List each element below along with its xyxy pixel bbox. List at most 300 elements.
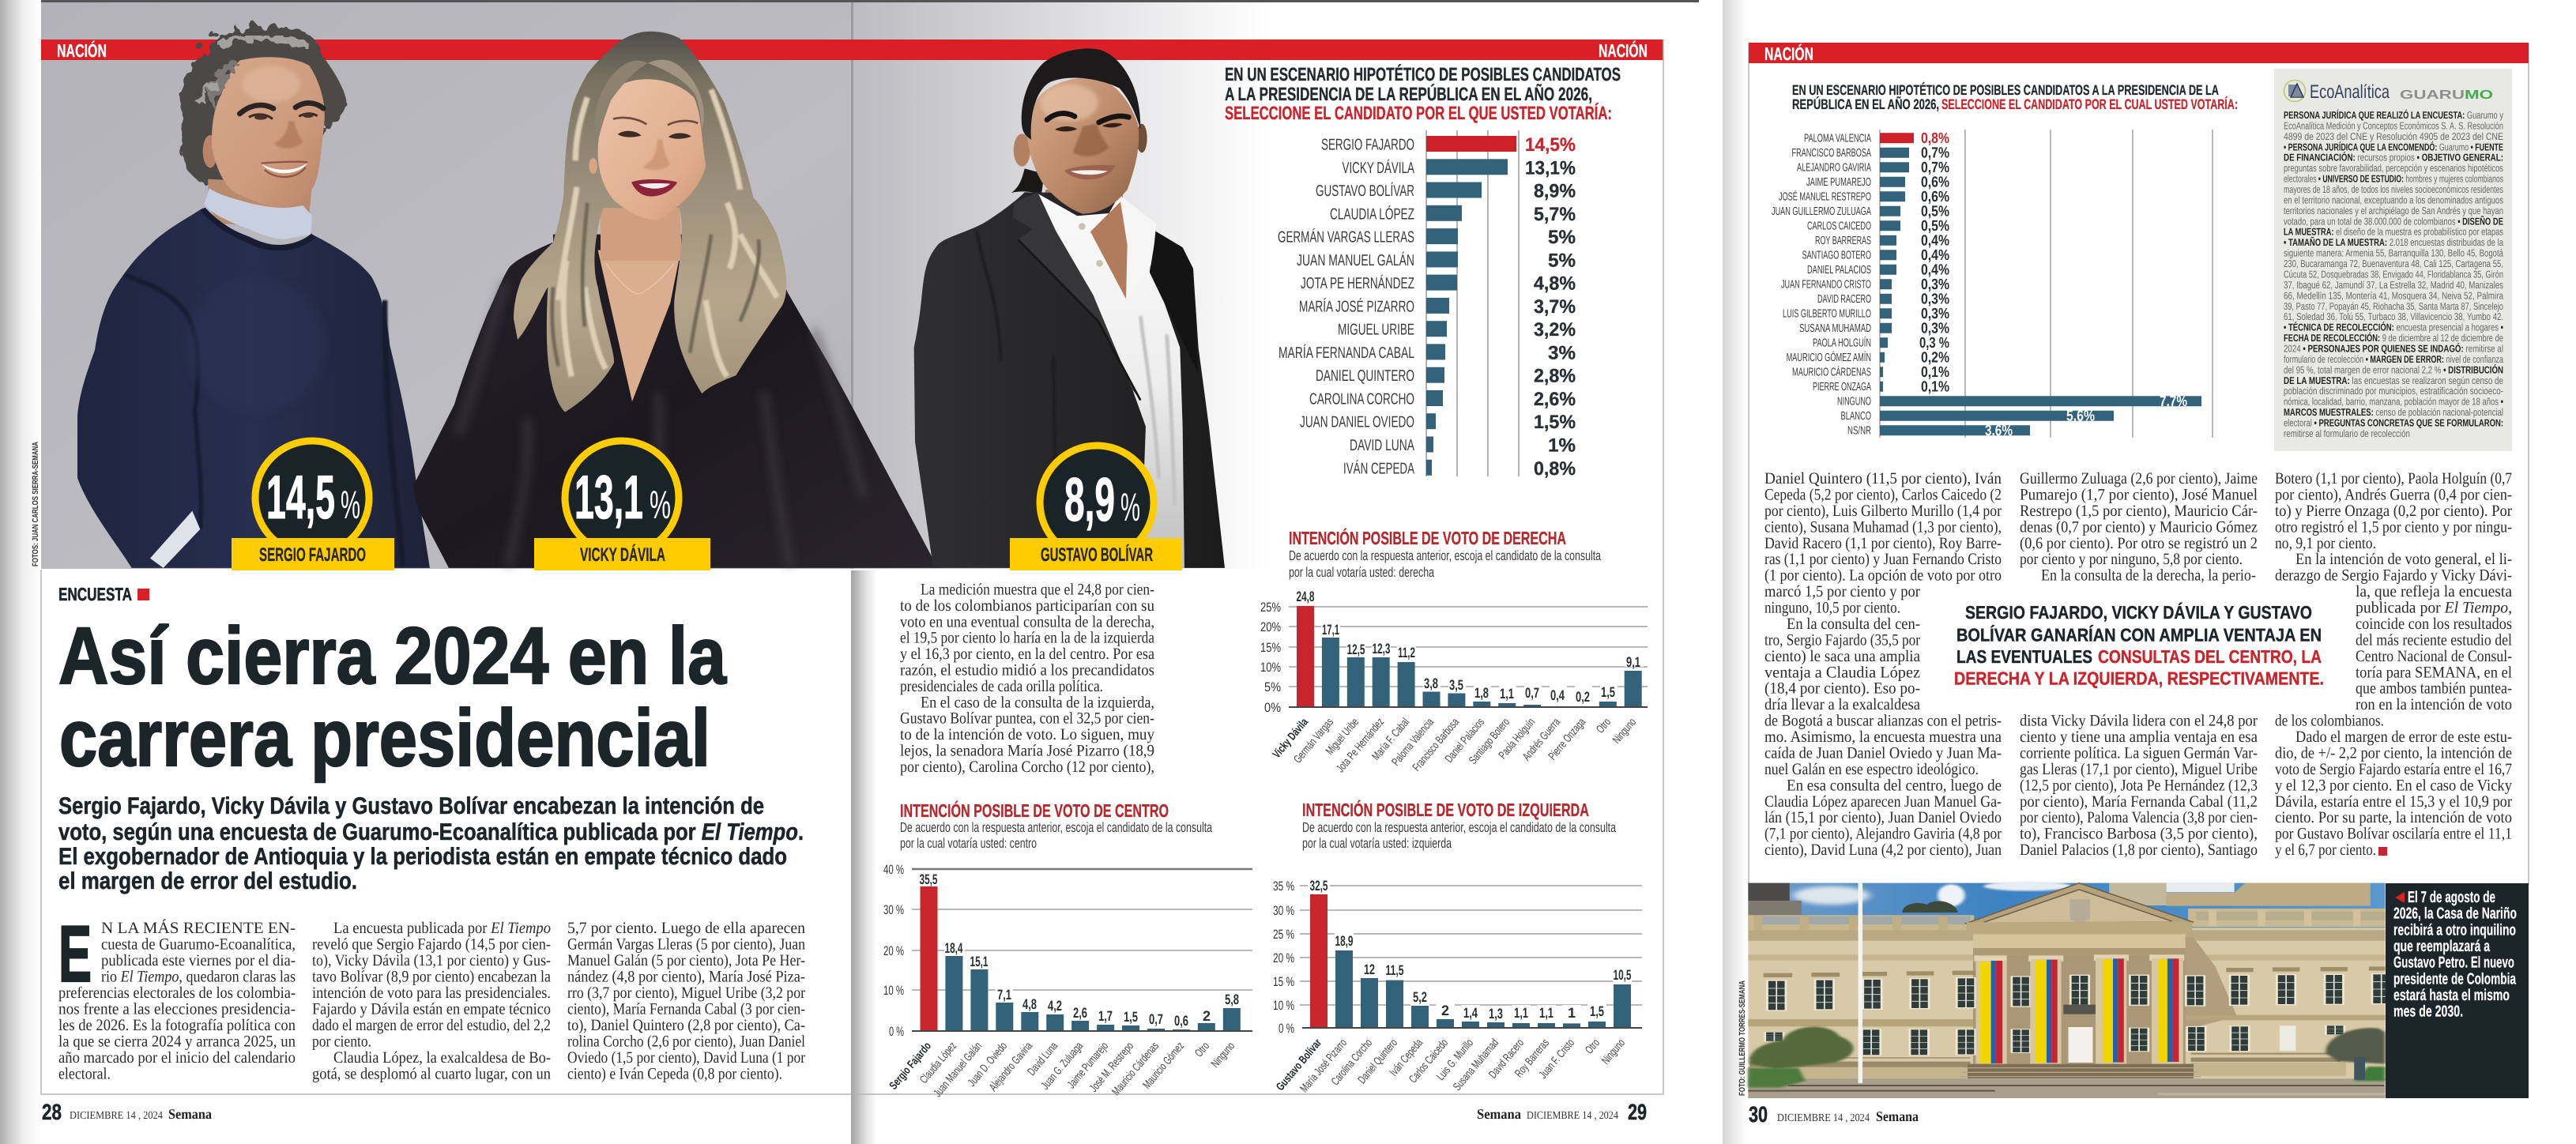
column chart centro: 2 xyxy=(1203,1008,1211,1024)
body column 2, page 28: reveló que Sergio Fajardo (14,5 por cien- xyxy=(312,935,551,953)
column chart derecha: Miguel Uribe xyxy=(1324,716,1361,758)
column chart derecha: Santiago Botero xyxy=(1467,716,1512,767)
body column 1, page 28 xyxy=(58,919,296,1082)
technical sheet text: electorales • UNIVERSO DE ESTUDIO: hombres y mujeres colombianos xyxy=(2284,173,2503,185)
body column 1, page 30: nuel Galán en ese espectro ideológico. xyxy=(1764,761,1979,778)
column chart centro: 10 % xyxy=(883,984,904,998)
horizontal bar chart: remaining candidates: 0,3% xyxy=(1921,277,1949,293)
body column 3, page 30: coincide con los resultados xyxy=(2356,615,2512,633)
column chart centro: Juan Manuel Galán xyxy=(932,1040,985,1100)
column chart centro: Mauricio Cárdenas xyxy=(1110,1040,1162,1098)
column chart derecha: 0,4 xyxy=(1550,687,1565,703)
column chart izquierda: Carolina Corcho xyxy=(1329,1037,1375,1088)
column chart derecha: Paola Holguín xyxy=(1497,716,1538,762)
body column, page 29: el 19,5 por ciento lo haría en la de la izquierda xyxy=(900,630,1154,647)
chart title centro: INTENCIÓN POSIBLE DE VOTO DE CENTRO xyxy=(900,800,1169,821)
row: Carolina Corcho: 2,6% xyxy=(1534,389,1576,410)
body column 2, page 30: Pumarejo (1,7 por ciento), José Manuel xyxy=(2020,486,2258,503)
row: Carolina Corcho: CAROLINA CORCHO xyxy=(1309,390,1414,408)
kicker: encuesta: ENCUESTA xyxy=(58,584,132,604)
column chart derecha xyxy=(1260,589,1648,775)
horizontal bar chart: remaining candidates: 0,3% xyxy=(1921,291,1949,308)
technical sheet text: 37, Ibagué 62, Jamundí 37, La Estrella 32, Madrid 40, Manizales xyxy=(2284,279,2503,291)
body column 1, page 30 xyxy=(1764,470,2002,859)
column chart izquierda: Otro xyxy=(1583,1037,1602,1056)
horizontal bar chart: remaining candidates: 0,7% xyxy=(1921,145,1949,161)
column chart centro: 1,7 xyxy=(1098,1008,1113,1024)
right page gutter shadow xyxy=(851,570,877,1144)
body column 2, page 30: to), Francisco Barbosa (3,5 por ciento), xyxy=(2020,826,2258,843)
caption box: Casa de Nariño: mes de 2030. xyxy=(2393,1003,2463,1021)
body column 1, page 30: Daniel Quintero (11,5 por ciento), Iván xyxy=(1764,470,2002,487)
row: Germán Vargas Lleras xyxy=(1278,227,1576,248)
row: María José Pizarro: 3,7% xyxy=(1534,296,1576,318)
percentage badge: Gustavo Bolívar: % xyxy=(1120,485,1140,529)
body column 3, page 28: rro (3,7 por ciento), Miguel Uribe (3,2 por xyxy=(567,984,805,1002)
figure: Gustavo Bolívar xyxy=(914,48,1225,568)
technical sheet text: 61, Soledad 36, Tolú 55, Turbaco 38, Villavicencio 38, Yumbo 42. xyxy=(2284,310,2503,322)
body column 3, page 28: rolina Corcho (2,6 por ciento), Juan Daniel xyxy=(567,1033,805,1050)
percentage badge: Sergio Fajardo: % xyxy=(341,483,360,527)
row: Jota Pe Hernández xyxy=(1301,273,1576,295)
body column 2, page 30: gas Lleras (17,1 por ciento), Miguel Uribe xyxy=(2020,761,2258,778)
row: Germán Vargas Lleras: GERMÁN VARGAS LLERAS xyxy=(1278,228,1414,246)
row: Sergio Fajardo xyxy=(1321,134,1576,156)
column chart derecha: Ninguno xyxy=(1610,716,1639,747)
column chart izquierda: 0 % xyxy=(1279,1022,1294,1036)
column chart derecha: 0% xyxy=(1264,701,1281,715)
photo credit: left page: FOTOS: JUAN CARLOS SIERRA-SEMANA xyxy=(31,442,40,566)
technical sheet text: votado, para un total de 38.000.000 de colombianos • DISEÑO DE xyxy=(2284,215,2503,227)
horizontal bar chart: remaining candidates: NINGUNO xyxy=(1837,396,1871,408)
column chart derecha: Andrés Guerra xyxy=(1520,716,1563,763)
chart subtitle izquierda: De acuerdo con la respuesta anterior, escoja el candidato de la consulta xyxy=(1302,819,1616,835)
pull quote: DERECHA Y LA IZQUIERDA, RESPECTIVAMENTE. xyxy=(1954,668,2324,689)
row: David Luna: DAVID LUNA xyxy=(1350,437,1414,454)
fold line xyxy=(851,2,853,569)
column chart izquierda: Daniel Quintero xyxy=(1356,1037,1400,1086)
column chart derecha: 15% xyxy=(1260,641,1281,655)
horizontal bar chart: remaining candidates: PIERRE ONZAGA xyxy=(1813,381,1871,393)
body column 1, page 30: En la consulta del cen- xyxy=(1787,615,1920,633)
body column, page 29: La medición muestra que el 24,8 por cien- xyxy=(921,581,1154,599)
footer page 28: DICIEMBRE 14 , 2024 xyxy=(70,1110,163,1122)
row: Daniel Quintero: DANIEL QUINTERO xyxy=(1316,367,1414,385)
body column 1, page 30: de Bogotá a buscar alianzas con el petris- xyxy=(1764,713,2002,730)
row: María Fernanda Cabal xyxy=(1279,342,1576,363)
column chart derecha: 12,3 xyxy=(1372,641,1391,657)
column chart izquierda: Ninguno xyxy=(1599,1037,1628,1067)
body column 3, page 28: to), Daniel Quintero (2,8 por ciento), Ca- xyxy=(567,1017,805,1034)
column chart izquierda: 1 xyxy=(1568,1005,1576,1021)
column chart centro: Alejandro Gaviria xyxy=(987,1040,1035,1094)
technical sheet text: en el territorio nacional, exceptuando a los denominados antiguos xyxy=(2284,194,2503,205)
upper balustrade xyxy=(1748,909,2386,932)
horizontal bar chart: remaining candidates: 0,2% xyxy=(1921,349,1949,367)
body column 2, page 28 xyxy=(312,920,551,1082)
body column 1, page 28: electoral. xyxy=(58,1065,111,1082)
column chart izquierda: 1,3 xyxy=(1489,1006,1503,1022)
body column, page 29: to de los colombianos participarían con su xyxy=(900,597,1154,615)
column chart izquierda: 18,9 xyxy=(1335,933,1353,949)
footer page 29: 29 xyxy=(1628,1100,1647,1124)
row: Juan Daniel Oviedo: JUAN DANIEL OVIEDO xyxy=(1300,414,1414,431)
deck paragraph: Sergio Fajardo, Vicky Dávila y Gustavo Bolívar encabezan la intención de xyxy=(58,793,764,819)
column chart derecha: 3,5 xyxy=(1449,677,1463,693)
horizontal bar chart: remaining candidates: JOSÉ MANUEL RESTREPO xyxy=(1779,190,1871,204)
body column 3, page 30: Dávila, estaría entre el 15,3 y el 10,9 por xyxy=(2275,793,2512,811)
technical sheet text: DE LA MUESTRA: las encuestas se realizaron según censo de xyxy=(2284,374,2503,386)
column chart izquierda: 12 xyxy=(1364,961,1375,977)
body column 1, page 28: preferencias electorales de los colombia- xyxy=(58,984,296,1002)
column chart izquierda: Juan F. Cristo xyxy=(1537,1037,1577,1082)
caption box: Casa de Nariño: Gustavo Petro. El nuevo xyxy=(2393,954,2514,972)
heading: page 30 question: REPÚBLICA EN EL AÑO 2026, xyxy=(1792,96,1939,112)
row: María Fernanda Cabal: 3% xyxy=(1548,342,1576,363)
column chart centro: José M. Restrepo xyxy=(1087,1040,1136,1095)
body column 2, page 30: por ciento y por ninguno, 5,8 por ciento. xyxy=(2020,551,2243,568)
body column 1, page 30: mo. Asimismo, la encuesta muestra una xyxy=(1764,728,2002,746)
body column 1, page 30: caída de Juan Daniel Oviedo y Juan Ma- xyxy=(1764,744,2002,762)
body column, page 29 xyxy=(900,581,1155,776)
column chart centro: 20 % xyxy=(883,944,904,958)
column chart centro: Ninguno xyxy=(1209,1040,1237,1071)
heading: hypothetical scenario question xyxy=(1225,64,1621,123)
column chart derecha: Francisco Barbosa xyxy=(1410,716,1462,774)
section bar: page 30 xyxy=(1749,43,2529,64)
trees and bushes xyxy=(1748,1027,2386,1088)
percentage badge: Sergio Fajardo: 14,5 xyxy=(266,462,335,532)
horizontal bar chart: remaining candidates: DANIEL PALACIOS xyxy=(1807,264,1871,277)
body column, page 29: to de la intención de voto. Lo siguen, muy xyxy=(900,726,1155,743)
portico pediment xyxy=(1965,883,2194,955)
body column 2, page 30: denas (0,7 por ciento) y Mauricio Gómez xyxy=(2020,518,2258,536)
columns with Colombian flags xyxy=(1974,954,2184,1064)
pull quote: CONSULTAS DEL CENTRO, LA xyxy=(2098,646,2322,667)
column chart derecha: 20% xyxy=(1260,620,1281,634)
row: Claudia López xyxy=(1330,204,1576,225)
body column 3, page 30: toría para SEMANA, en el xyxy=(2356,664,2512,681)
section bar: right page: NACIÓN xyxy=(1599,40,1648,61)
column chart centro: 7,1 xyxy=(997,987,1011,1003)
column chart izquierda xyxy=(1273,877,1642,1095)
column chart derecha: 0,2 xyxy=(1576,689,1590,705)
technical sheet text: • PERSONA JURÍDICA QUE LA ENCOMENDÓ: Guarumo • FUENTE xyxy=(2284,141,2503,152)
row: Carolina Corcho xyxy=(1309,389,1576,410)
row: Juan Daniel Oviedo: 1,5% xyxy=(1534,412,1576,433)
body column 1, page 30: ninguno, 10,5 por ciento. xyxy=(1764,599,1900,616)
column chart centro: 30 % xyxy=(883,903,904,917)
column chart derecha: 11,2 xyxy=(1398,645,1415,660)
courtyard xyxy=(1748,1078,2386,1098)
drop cap E: E xyxy=(58,910,92,999)
percentage badge: Vicky Dávila: 13,1 xyxy=(574,462,643,532)
technical sheet text: • TÉCNICA DE RECOLECCIÓN: encuesta presencial a hogares • xyxy=(2284,322,2503,333)
row: Iván Cepeda xyxy=(1343,458,1576,480)
body column 3, page 30: publicada por El Tiempo, xyxy=(2356,599,2512,616)
technical sheet text: nómica, localidad, barrio, manzana, población mayor de 18 años • xyxy=(2284,396,2503,408)
section bar: right page xyxy=(853,40,1663,61)
column chart derecha: 1,8 xyxy=(1474,685,1489,701)
column chart izquierda: 1,4 xyxy=(1463,1005,1478,1021)
column chart centro: 2,6 xyxy=(1073,1005,1087,1021)
row: Miguel Uribe: 3,2% xyxy=(1534,319,1576,341)
horizontal bar chart: remaining candidates: 0,3 % xyxy=(1919,335,1949,352)
footer page 29: DICIEMBRE 14 , 2024 xyxy=(1527,1110,1618,1122)
horizontal bar chart: remaining candidates: MAURICIO GÓMEZ AMÍN xyxy=(1787,351,1871,364)
body column 1, page 28: publicada este viernes por el dia- xyxy=(101,952,296,969)
column chart centro: Juan G. Zuluaga xyxy=(1039,1040,1086,1092)
main headline xyxy=(58,611,727,783)
chart subtitle centro: por la cual votaría usted: centro xyxy=(900,835,1037,851)
pull quote: LAS EVENTUALES xyxy=(1956,646,2092,667)
horizontal bar chart: remaining candidates xyxy=(1772,130,2213,439)
body column 3, page 28: ciento) e Iván Cepeda (0,8 por ciento). xyxy=(567,1065,782,1082)
column chart centro: 5,8 xyxy=(1225,992,1239,1007)
body column 3, page 28 xyxy=(567,920,805,1082)
body column 3, page 28: ciento), María Fernanda Cabal (3 por cien- xyxy=(567,1000,805,1018)
technical sheet text: 2024 • PERSONAJES POR QUIENES SE INDAGÓ: remitirse al xyxy=(2284,343,2503,354)
body column, page 29: presidenciales de cada orilla política. xyxy=(900,678,1103,695)
body column 3, page 30: voto de Sergio Fajardo estaría entre el 16,7 xyxy=(2275,761,2512,778)
heading: hypothetical scenario question: EN UN ESCENARIO HIPOTÉTICO DE POSIBLES CANDIDATOS xyxy=(1225,64,1621,85)
technical sheet text: PERSONA JURÍDICA QUE REALIZÓ LA ENCUESTA: Guarumo y xyxy=(2284,109,2503,121)
body column 3, page 30: del más reciente estudio del xyxy=(2356,631,2512,649)
row: Daniel Quintero: 2,8% xyxy=(1534,366,1576,387)
column chart izquierda: 11,5 xyxy=(1386,962,1403,978)
horizontal bar chart: remaining candidates: 0,8% xyxy=(1921,130,1949,147)
column chart derecha: 0,7 xyxy=(1525,685,1539,701)
pull quote: SERGIO FAJARDO, VICKY DÁVILA Y GUSTAVO xyxy=(1965,602,2312,623)
body column 3, page 30 xyxy=(2275,470,2513,859)
body column 2, page 28: Fajardo y Dávila están en empate técnico xyxy=(312,1000,551,1018)
body column, page 29: En el caso de la consulta de la izquierda, xyxy=(921,694,1154,711)
horizontal bar chart: remaining candidates: 0,3% xyxy=(1921,306,1949,322)
body column 1, page 30: En esa consulta del centro, luego de xyxy=(1787,777,2002,794)
icon: red left arrow xyxy=(2395,892,2405,903)
technical sheet text: MARCOS MUESTRALES: censo de población nacional-potencial xyxy=(2284,406,2503,418)
body column 1, page 30: (18,4 por ciento). Eso po- xyxy=(1764,680,1920,698)
caption box: Casa de Nariño: El 7 de agosto de xyxy=(2408,889,2495,906)
string course xyxy=(1748,1015,2386,1026)
chart subtitle izquierda xyxy=(1302,819,1616,851)
row: Juan Manuel Galán: 5% xyxy=(1548,250,1576,271)
technical sheet text: preguntas sobre favorabilidad, percepción y escenarios hipotéticos xyxy=(2284,162,2503,174)
body column 1, page 30: marcó 1,5 por ciento y por xyxy=(1764,583,1920,600)
panel: ficha técnica xyxy=(2274,69,2512,451)
body column 2, page 30: Restrepo (1,5 por ciento), Mauricio Cár- xyxy=(2020,502,2258,520)
heading: page 30 question xyxy=(1792,82,2238,112)
horizontal bar chart: remaining candidates: 5,6% xyxy=(2066,408,2095,425)
caption box: Casa de Nariño xyxy=(2386,883,2529,1098)
body column 2, page 28: to), Vicky Dávila (13,1 por ciento) y Gus- xyxy=(312,952,551,969)
column chart izquierda: Luis G. Murillo xyxy=(1434,1037,1476,1083)
caption box: Casa de Nariño: que reemplazará a xyxy=(2393,938,2491,955)
body column, page 29: Gustavo Bolívar puntea, con el 32,5 por cien- xyxy=(900,710,1154,728)
column chart izquierda: 2 xyxy=(1441,1003,1449,1018)
body column 2, page 28: tavo Bolívar (8,9 por ciento) encabezan la xyxy=(312,968,551,985)
column chart derecha: María F. Cabal xyxy=(1370,716,1412,763)
technical sheet text: población discriminado por municipios, estratificación socioeco- xyxy=(2284,385,2503,397)
caption box: Casa de Nariño: recibirá a otro inquilino xyxy=(2393,921,2516,939)
figure: Vicky Dávila xyxy=(413,32,940,568)
horizontal bar chart: remaining candidates: 0,4% xyxy=(1921,232,1949,250)
shaded portico xyxy=(1973,954,2186,1064)
main headline: carrera presidencial xyxy=(59,693,710,783)
body column, page 29: y el 16,3 por ciento, en la del centro. Por esa xyxy=(900,645,1154,663)
column chart izquierda: 1,5 xyxy=(1590,1003,1604,1019)
row: María Fernanda Cabal: MARÍA FERNANDA CABAL xyxy=(1279,344,1414,362)
column chart derecha: 1,1 xyxy=(1500,686,1514,702)
technical sheet text: territorios nacionales y el archipiélago de San Andrés y que hayan xyxy=(2284,205,2503,216)
body column 2, page 30: (0,6 por ciento). Por otro se registró un 2 xyxy=(2020,535,2258,552)
row: Daniel Quintero xyxy=(1316,366,1576,387)
row: Iván Cepeda: IVÁN CEPEDA xyxy=(1343,459,1414,477)
chart subtitle izquierda: por la cual votaría usted: izquierda xyxy=(1302,835,1452,851)
body column 1, page 30: Cepeda (5,2 por ciento), Carlos Caicedo (2 xyxy=(1764,486,2002,503)
body column 1, page 28: rio El Tiempo, quedaron claras las xyxy=(101,968,296,985)
column chart centro: Mauricio Gómez xyxy=(1141,1040,1187,1092)
body column 2, page 28: gotá, se desplomó al cuarto lugar, con un xyxy=(312,1065,551,1082)
column chart centro: 1,5 xyxy=(1124,1009,1138,1025)
chart subtitle derecha: De acuerdo con la respuesta anterior, escoja el candidato de la consulta xyxy=(1289,548,1601,563)
caption box: Casa de Nariño: presidente de Colombia xyxy=(2393,970,2517,988)
technical sheet text: 4899 de 2023 del CNE y Resolución 4905 de 2023 del CNE xyxy=(2284,130,2503,142)
column chart centro: David Luna xyxy=(1026,1040,1060,1078)
body column 1, page 30: lán (15,1 por ciento), Juan Daniel Oviedo xyxy=(1764,809,2002,826)
body column 1, page 28: año marcado por el inicio del calendario xyxy=(58,1049,296,1067)
body column 1, page 30: (7,1 por ciento), Alejandro Gaviria (4,8 por xyxy=(1764,826,2002,843)
body column 1, page 30: (1 por ciento). La opción de voto por otro xyxy=(1764,567,2002,585)
body column 2, page 30: (12,5 por ciento), Jota Pe Hernández (12,3 xyxy=(2020,777,2258,794)
column chart centro: Otro xyxy=(1192,1040,1212,1059)
technical sheet text xyxy=(2284,109,2504,439)
body column 2, page 30: ciento y tiene una amplia ventaja en esa xyxy=(2020,728,2258,746)
horizontal bar chart: remaining candidates: BLANCO xyxy=(1841,410,1871,423)
row: Miguel Uribe: MIGUEL URIBE xyxy=(1338,322,1414,339)
top edge strip xyxy=(0,0,1699,2)
horizontal bar chart: remaining candidates: 0,4% xyxy=(1921,247,1949,264)
caption box: Casa de Nariño: estará hasta el mismo xyxy=(2393,987,2510,1004)
column chart centro: 18,4 xyxy=(945,940,962,956)
deck paragraph: El exgobernador de Antioquia y la periodista están en empate técnico dado xyxy=(58,844,787,870)
horizontal bar chart: remaining candidates: 7,7% xyxy=(2160,393,2187,410)
horizontal bar chart: remaining candidates: 0,7% xyxy=(1921,160,1949,176)
horizontal bar chart: remaining candidates: 0,6% xyxy=(1921,189,1949,205)
horizontal bar chart: remaining candidates: PAOLA HOLGUÍN xyxy=(1813,337,1871,350)
body column 2, page 30: corriente política. La siguen Germán Var- xyxy=(2020,744,2258,762)
body column 3, page 30: de los colombianos. xyxy=(2275,713,2384,730)
row: David Luna xyxy=(1350,435,1576,457)
column chart centro: 15,1 xyxy=(970,954,988,969)
body column 3, page 28: 5,7 por ciento. Luego de ella aparecen xyxy=(567,920,805,937)
horizontal bar chart: remaining candidates: JAIME PUMAREJO xyxy=(1806,176,1871,189)
column chart izquierda: Gustavo Bolívar xyxy=(1274,1037,1324,1093)
column chart izquierda: 1,1 xyxy=(1539,1005,1554,1021)
column chart centro: 40 % xyxy=(883,863,904,877)
heading: hypothetical scenario question: SELECCIONE EL CANDIDATO POR EL QUE USTED VOTARÍA: xyxy=(1225,103,1612,123)
row: Iván Cepeda: 0,8% xyxy=(1534,458,1576,480)
column chart derecha: Jota Pe Hernández xyxy=(1335,716,1387,775)
footer page 28 xyxy=(42,1100,212,1124)
horizontal bar chart: remaining candidates: CARLOS CAICEDO xyxy=(1807,220,1871,233)
section bar: left page xyxy=(41,40,853,61)
body column 1, page 30: David Racero (1,1 por ciento), Roy Barre- xyxy=(1764,535,2002,552)
body column 2, page 28: dado el margen de error del estudio, del 2,2 xyxy=(312,1017,551,1034)
body column 1, page 30: ciento) le saca una amplia xyxy=(1764,648,1920,665)
body column 3, page 28: Germán Vargas Lleras (5 por ciento), Juan xyxy=(567,935,805,953)
panel: chart izquierda xyxy=(1273,800,1642,1095)
body column 2, page 30: En la consulta de la derecha, la perio- xyxy=(2041,567,2256,585)
horizontal bar chart: remaining candidates: ROY BARRERAS xyxy=(1815,235,1871,247)
column chart derecha: 9,1 xyxy=(1626,654,1640,670)
body column 3, page 30: no, 9,1 por ciento. xyxy=(2275,535,2376,552)
column chart izquierda: David Racero xyxy=(1486,1037,1527,1081)
column chart derecha: 10% xyxy=(1260,660,1281,675)
body column 3, page 30: y el 12,3 por ciento. En el caso de Vicky xyxy=(2275,777,2513,794)
column chart derecha: 3,8 xyxy=(1424,675,1438,691)
column chart derecha: 12,5 xyxy=(1346,642,1365,657)
column chart derecha: 5% xyxy=(1264,680,1281,694)
row: Gustavo Bolívar xyxy=(1316,180,1576,202)
body column 1, page 30: ciento), David Luna (4,2 por ciento), Juan xyxy=(1764,841,2002,859)
row: David Luna: 1% xyxy=(1548,435,1576,457)
horizontal bar chart: remaining candidates: 0,4% xyxy=(1921,262,1949,278)
heading: page 30 question: SELECCIONE EL CANDIDATO POR EL CUAL USTED VOTARÍA: xyxy=(1941,96,2238,112)
body column 2, page 30 xyxy=(2020,470,2258,859)
photo backdrop left page xyxy=(41,2,851,569)
cast shadow on right wing xyxy=(2186,938,2237,1029)
row: Juan Manuel Galán: JUAN MANUEL GALÁN xyxy=(1297,251,1414,269)
left page gutter shadow xyxy=(0,0,41,1144)
logo: Guarumo: GUARU MO xyxy=(2400,88,2493,102)
body column 1, page 30: dría llevar a la exalcaldesa xyxy=(1764,696,1920,713)
percentage badge: Vicky Dávila: % xyxy=(650,483,671,527)
technical sheet text: 230, Bucaramanga 72, Buenaventura 48, Cali 125, Cartagena 55, xyxy=(2284,258,2503,269)
body column 1, page 30: tro, Sergio Fajardo (35,5 por xyxy=(1764,631,1920,649)
row: Juan Manuel Galán xyxy=(1297,250,1576,271)
body column 2, page 30: por ciento), María Fernanda Cabal (11,2 xyxy=(2020,793,2258,811)
body column 3, page 30: Botero (1,1 por ciento), Paola Holguín (0,7 xyxy=(2275,470,2512,487)
row: Claudia López: CLAUDIA LÓPEZ xyxy=(1330,205,1414,223)
body column 2, page 28: por ciento. xyxy=(312,1033,371,1050)
horizontal bar chart: remaining candidates: 0,1% xyxy=(1921,364,1949,381)
body column 1, page 28: la que se cierra 2024 y arranca 2025, un xyxy=(58,1033,296,1050)
row: Juan Daniel Oviedo xyxy=(1300,412,1576,433)
caption box: Casa de Nariño: 2026, la Casa de Nariño xyxy=(2393,905,2517,923)
body column 3, page 30: dio, de +/- 2,2 por ciento, la intención de xyxy=(2275,744,2512,762)
body column 3, page 30: que ambos también puntea- xyxy=(2356,680,2512,698)
column chart centro: 4,2 xyxy=(1048,998,1062,1014)
panel: chart centro xyxy=(883,800,1252,1100)
body column, page 29: razón, el estudio midió a los precandidatos xyxy=(900,662,1154,679)
horizontal bar chart: remaining candidates: ALEJANDRO GAVIRIA xyxy=(1797,162,1871,175)
body column, page 29: lejos, la senadora María José Pizarro (18,9 xyxy=(900,743,1154,760)
body column 3, page 30: En la intención de voto general, el li- xyxy=(2295,551,2512,568)
body column 3, page 28: nández (4,8 por ciento), María José Piza- xyxy=(567,968,805,985)
pull quote: BOLÍVAR GANARÍAN CON AMPLIA VENTAJA EN xyxy=(1956,624,2322,645)
chart title izquierda: INTENCIÓN POSIBLE DE VOTO DE IZQUIERDA xyxy=(1302,800,1589,820)
row: María José Pizarro: MARÍA JOSÉ PIZARRO xyxy=(1299,297,1414,315)
technical sheet text: siguiente manera: Armenia 55, Barranquilla 130, Bello 45, Bogotá xyxy=(2284,247,2504,259)
horizontal bar chart: remaining candidates: 0,5% xyxy=(1921,204,1949,220)
row: Claudia López: 5,7% xyxy=(1534,204,1576,225)
horizontal bar chart: remaining candidates: LUIS GILBERTO MURILLO xyxy=(1783,308,1871,321)
column chart derecha: Otro xyxy=(1594,716,1614,736)
technical sheet text: electoral • PREGUNTAS CONCRETAS QUE SE FORMULARON: xyxy=(2284,417,2503,428)
footer page 28: 28 xyxy=(42,1100,62,1124)
column chart centro: 35,5 xyxy=(920,871,937,887)
